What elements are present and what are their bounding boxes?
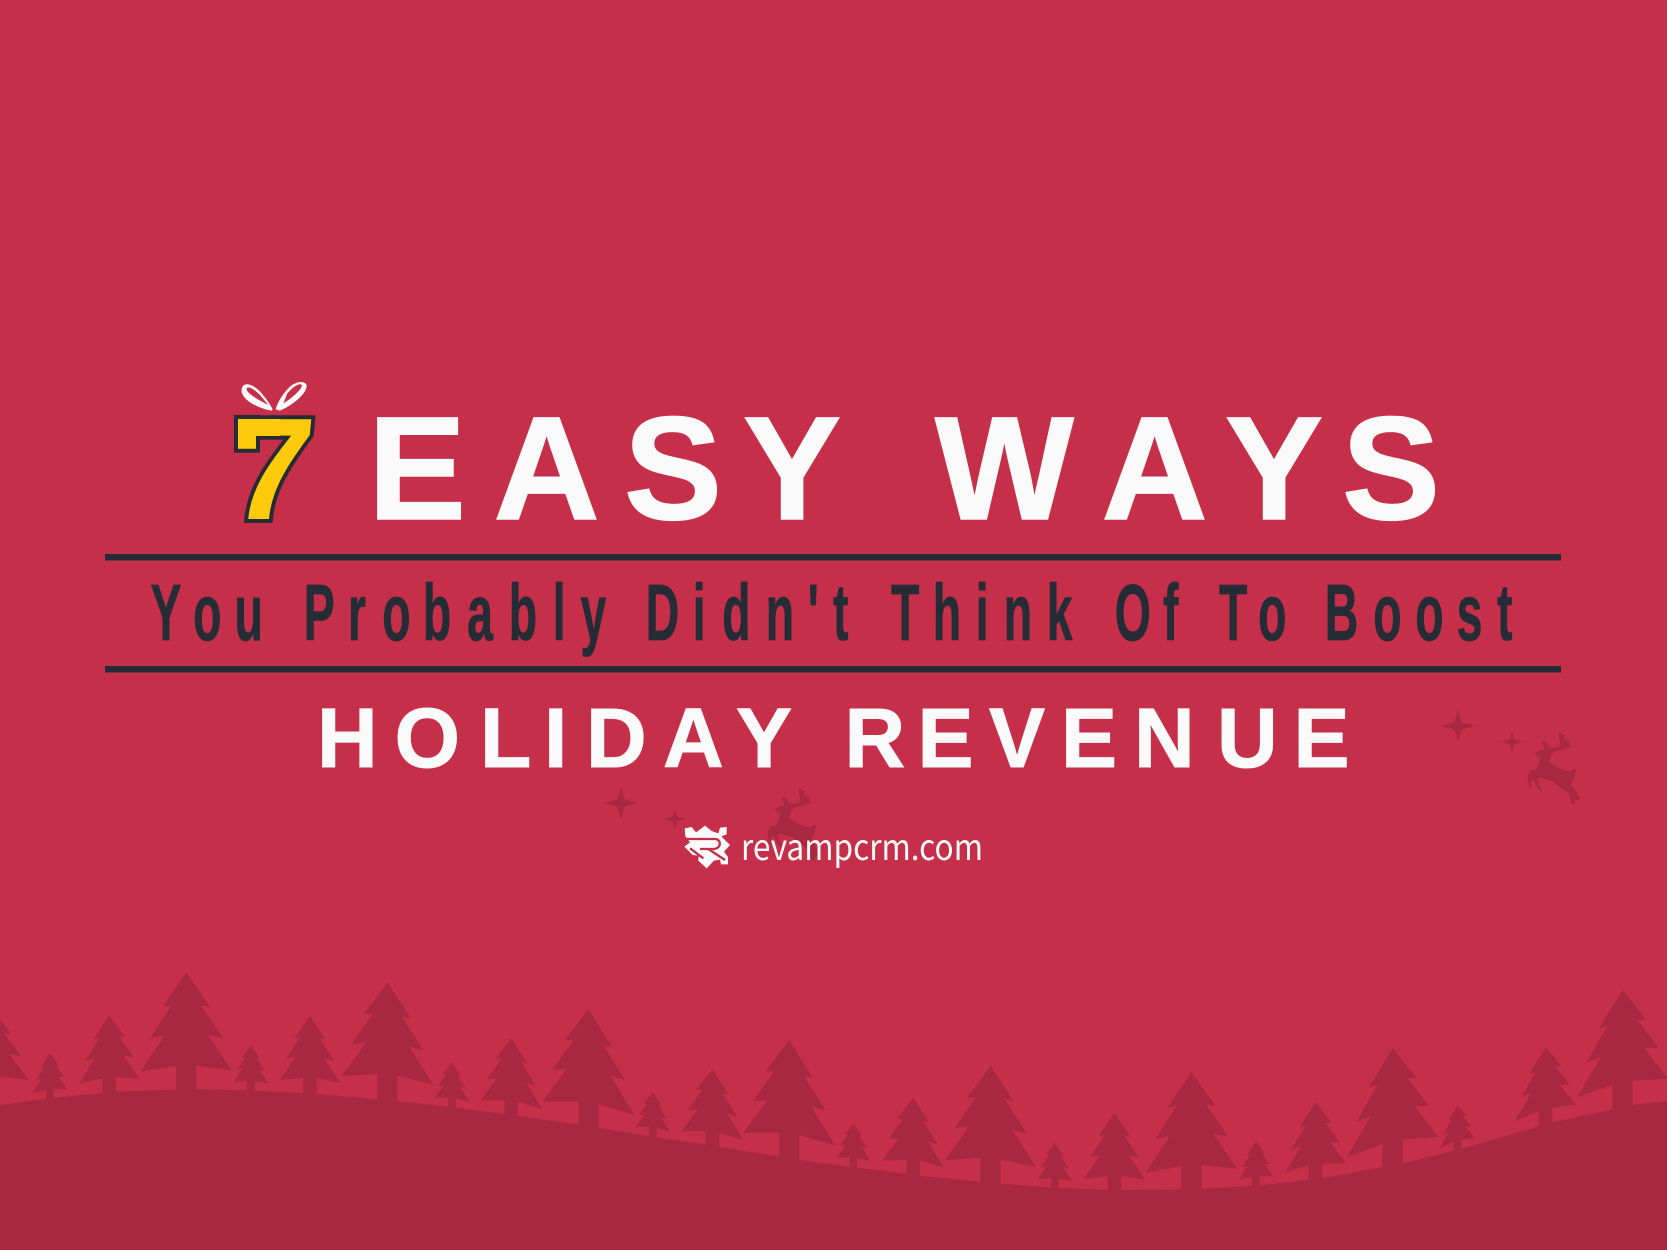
heading: easy ways: EASY WAYS [368,387,1440,551]
seven serif fill [238,419,280,449]
divider: top rule [105,554,1561,560]
heading: holiday revenue: HOLIDAY REVENUE [317,691,1350,785]
seven serif outline [234,415,260,453]
divider: bottom rule [105,666,1561,672]
tree line [0,972,1667,1224]
decoration: left stars and reindeer [604,787,819,860]
subheading: You Probably Didn't Think Of To Boost [151,568,1512,657]
icon: gift number seven [225,382,321,550]
decoration: right stars and reindeer [1441,710,1579,804]
number seven: 7 [225,387,321,550]
icon: revamp puzzle logo [684,826,730,868]
bow [242,382,307,411]
snowy hill [0,1089,1667,1250]
website url: revampcrm.com [741,819,983,871]
